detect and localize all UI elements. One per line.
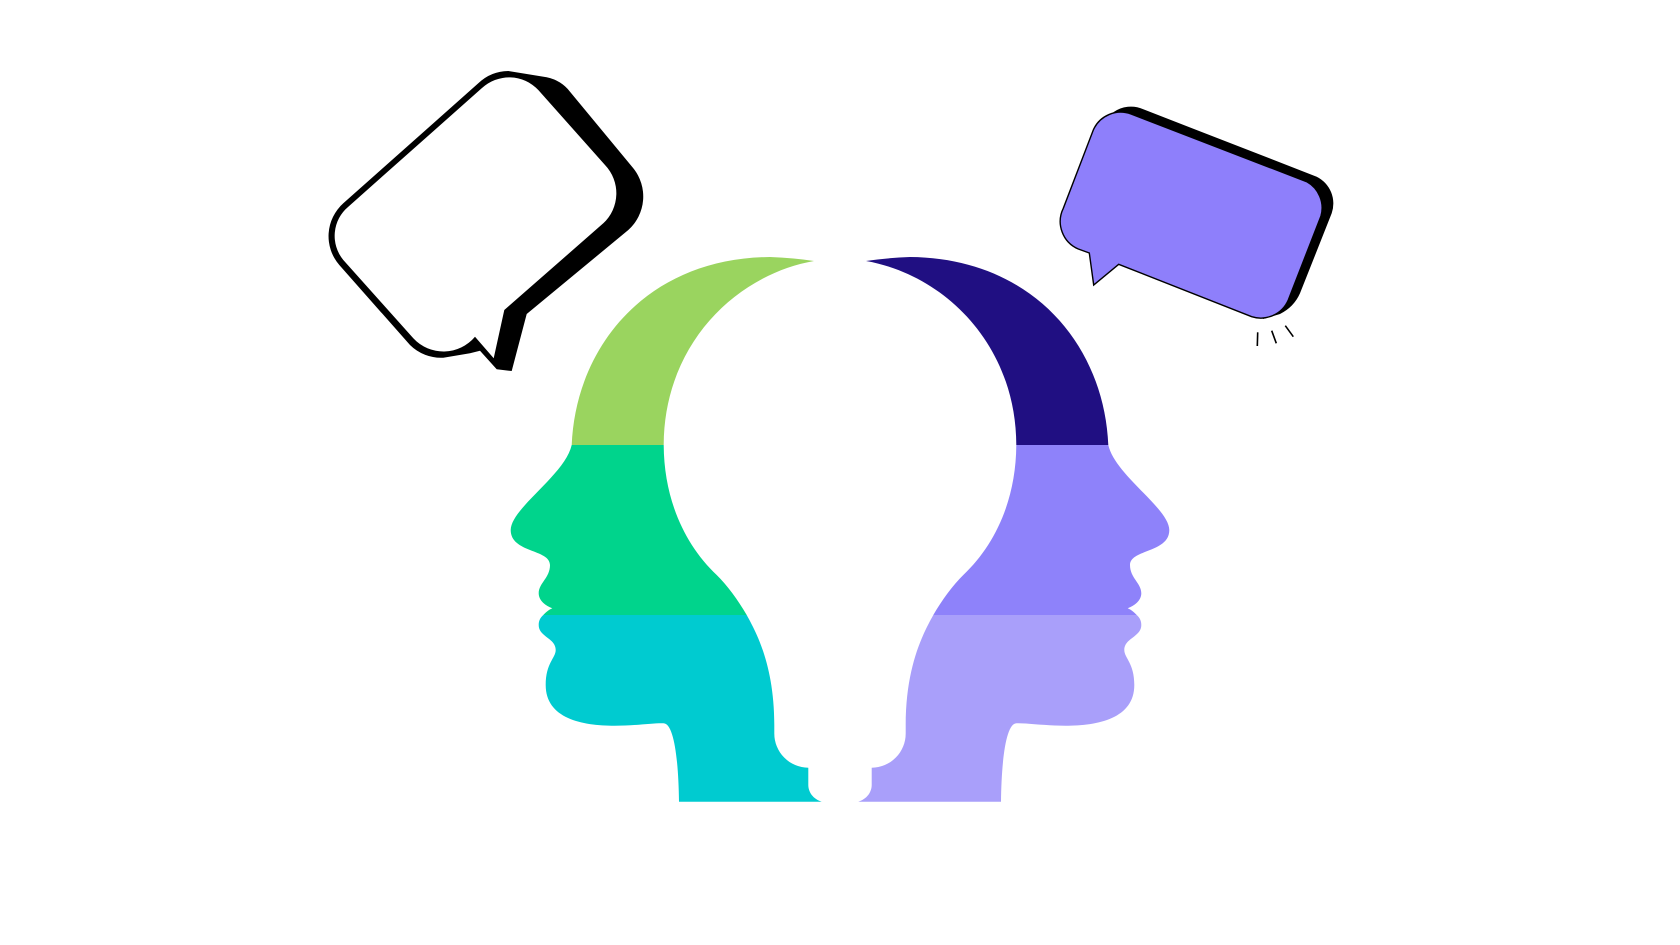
left bubble: white body xyxy=(335,77,616,358)
right bubble: purple body xyxy=(1060,112,1322,318)
right head: chin and neck band xyxy=(858,615,1141,802)
left speech bubble xyxy=(329,71,643,371)
emphasis ticks under right bubble xyxy=(1257,326,1293,346)
left head: crown band xyxy=(572,257,814,445)
right head: crown band xyxy=(866,257,1108,445)
right speech bubble xyxy=(1060,107,1333,319)
left bubble: black shadow and outline xyxy=(329,71,643,371)
left head: chin and neck band xyxy=(539,615,822,802)
left head xyxy=(511,257,822,802)
right bubble: black shadow xyxy=(1113,107,1333,319)
right head xyxy=(858,257,1169,802)
left head: nose band xyxy=(511,445,747,615)
right head: nose band xyxy=(933,445,1169,615)
